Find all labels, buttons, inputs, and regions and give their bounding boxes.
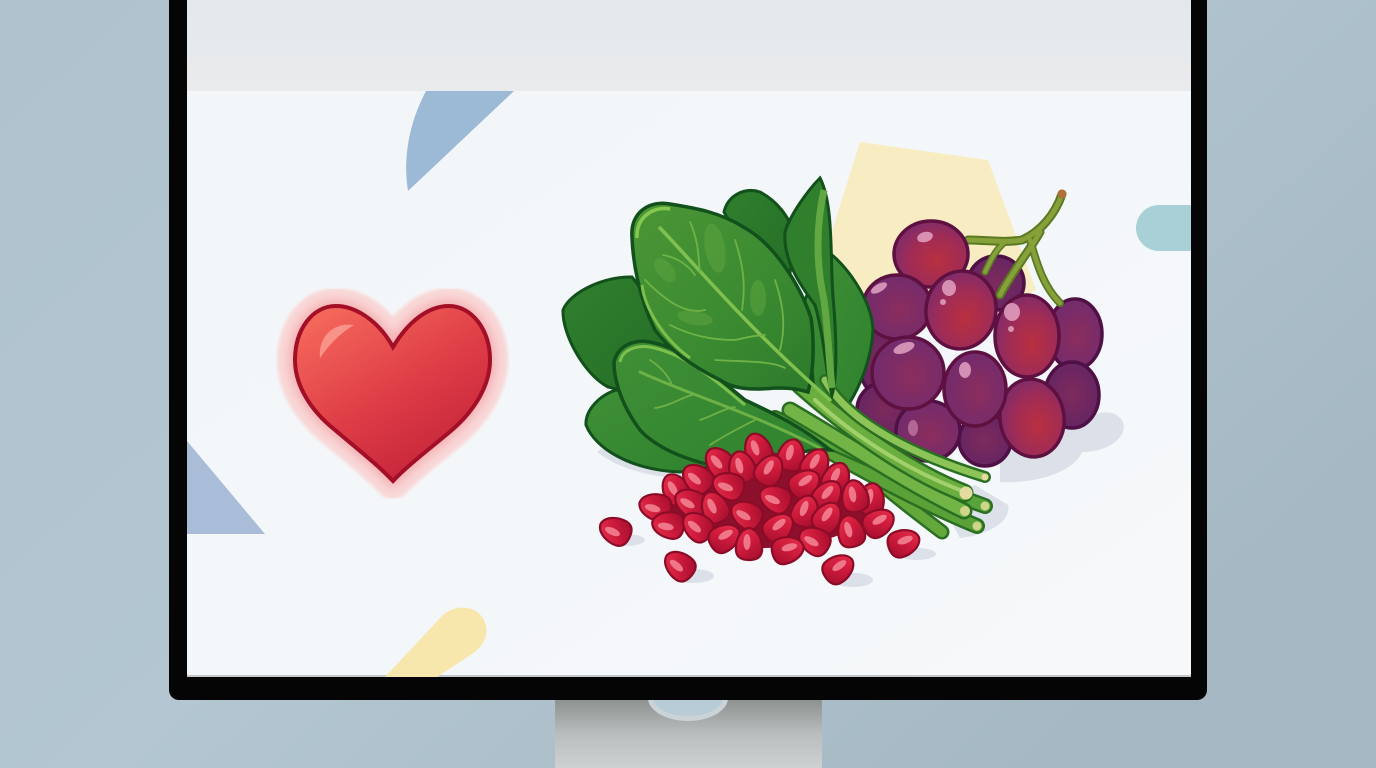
loose seed <box>595 512 635 549</box>
shape: teal pill <box>1136 205 1191 251</box>
pile base <box>660 450 868 548</box>
upright leaf <box>785 178 836 395</box>
right dark leaf <box>805 250 873 410</box>
pomegranate seeds <box>595 430 923 588</box>
shape: yellow pill <box>385 608 486 677</box>
loose seed <box>659 545 700 586</box>
monitor screen <box>187 0 1191 677</box>
spinach bunch <box>563 178 990 532</box>
heart highlight <box>320 325 354 358</box>
back top leaf <box>724 191 796 300</box>
lower front leaf <box>614 341 830 470</box>
shape: blue triangle <box>187 441 265 534</box>
back grapes <box>857 256 1102 466</box>
stand notch <box>648 698 728 721</box>
monitor bezel <box>169 0 1207 700</box>
loose seed <box>884 525 923 560</box>
food shadows <box>597 412 1124 587</box>
icon: glowing heart <box>295 306 490 481</box>
lower-left leaf <box>586 390 735 472</box>
monitor stand <box>555 698 822 768</box>
big front leaf <box>632 203 813 392</box>
stems <box>775 380 990 532</box>
left dark leaf <box>563 277 680 400</box>
front grapes <box>863 221 1069 461</box>
leaf veins <box>645 222 830 400</box>
grapes bunch <box>857 190 1102 466</box>
shape: yellow hexagon <box>826 142 1036 330</box>
stem of grapes <box>968 194 1062 303</box>
shape: blue wedge <box>406 91 514 191</box>
loose seed <box>818 548 859 588</box>
grape highlights <box>869 230 1020 436</box>
top band <box>187 0 1191 91</box>
